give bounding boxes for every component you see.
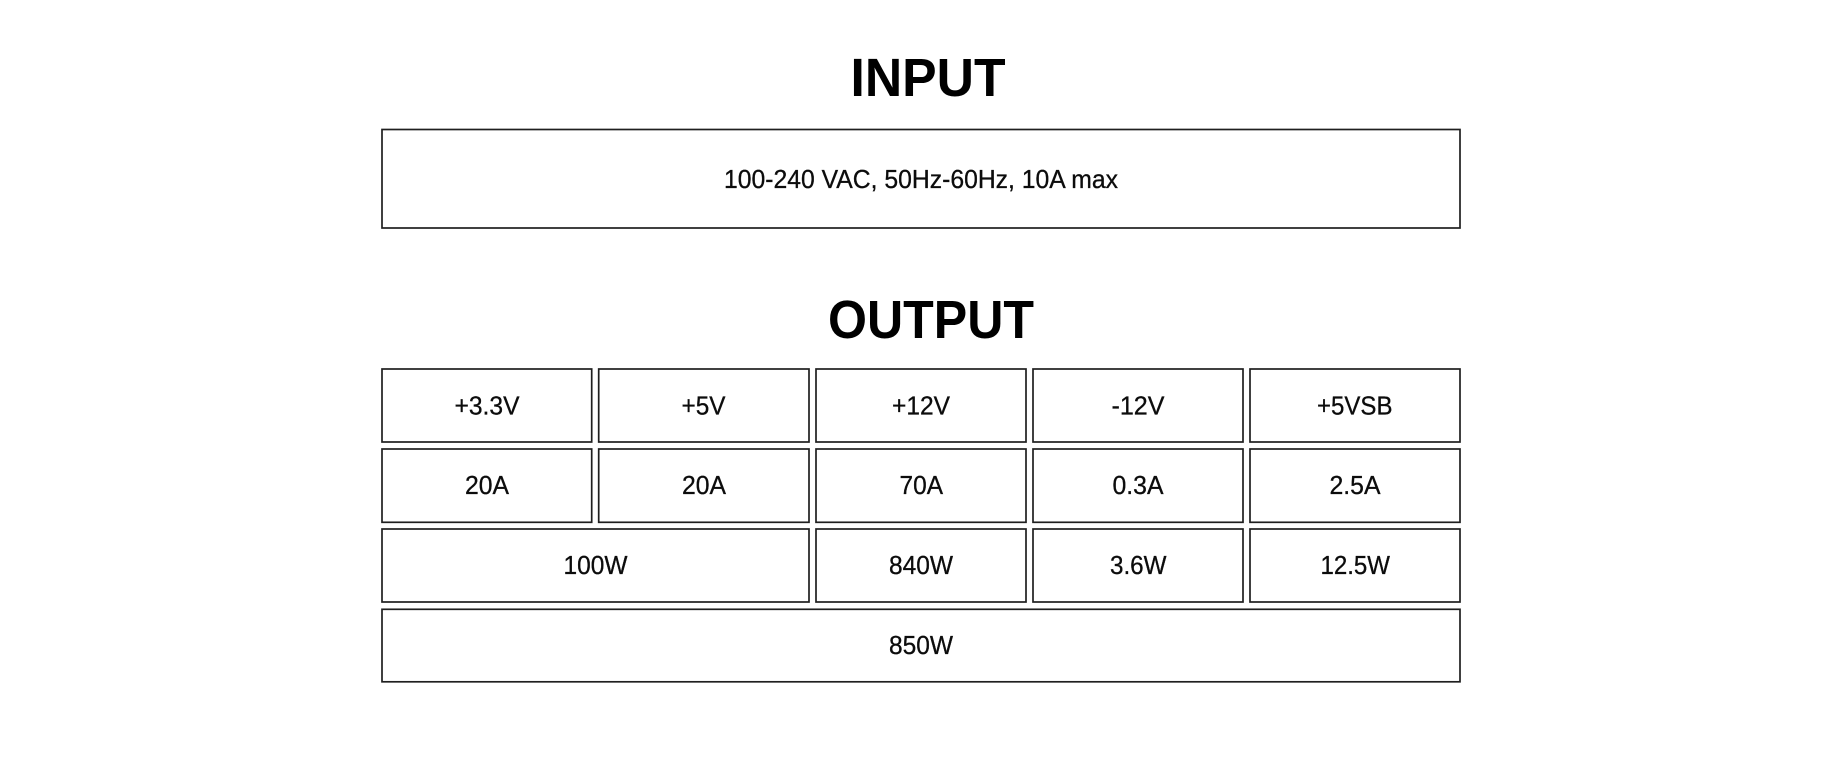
row: voltage rails: +12V (892, 390, 951, 420)
row: current per rail: 0.3A (1112, 470, 1164, 500)
row: total power: 850W (889, 630, 953, 660)
row: voltage rails: +3.3V (454, 390, 520, 420)
row: current per rail: 2.5A (1330, 470, 1381, 500)
row: power per rail: 12.5W (1320, 550, 1390, 580)
table: output specification (382, 369, 1460, 682)
row: voltage rails (382, 369, 1460, 442)
row: power per rail: 3.6W (1110, 550, 1167, 580)
row: voltage rails: -12V (1112, 390, 1165, 420)
row: current per rail: 20A (682, 470, 727, 500)
row: power per rail (382, 529, 1460, 602)
row: current per rail (382, 449, 1460, 522)
row: voltage rails: +5V (682, 390, 726, 420)
panel: input specification: 100-240 VAC, 50Hz-60Hz, 10A max (724, 164, 1118, 194)
panel: input specification (382, 130, 1460, 228)
row: voltage rails: +5VSB (1317, 390, 1392, 420)
row: power per rail: 100W (564, 550, 628, 580)
heading: OUTPUT: OUTPUT (828, 290, 1034, 350)
row: power per rail: 840W (889, 550, 953, 580)
heading: INPUT: INPUT (850, 48, 1006, 108)
row: current per rail: 70A (900, 470, 944, 500)
row: current per rail: 20A (465, 470, 510, 500)
row: total power (382, 609, 1460, 682)
